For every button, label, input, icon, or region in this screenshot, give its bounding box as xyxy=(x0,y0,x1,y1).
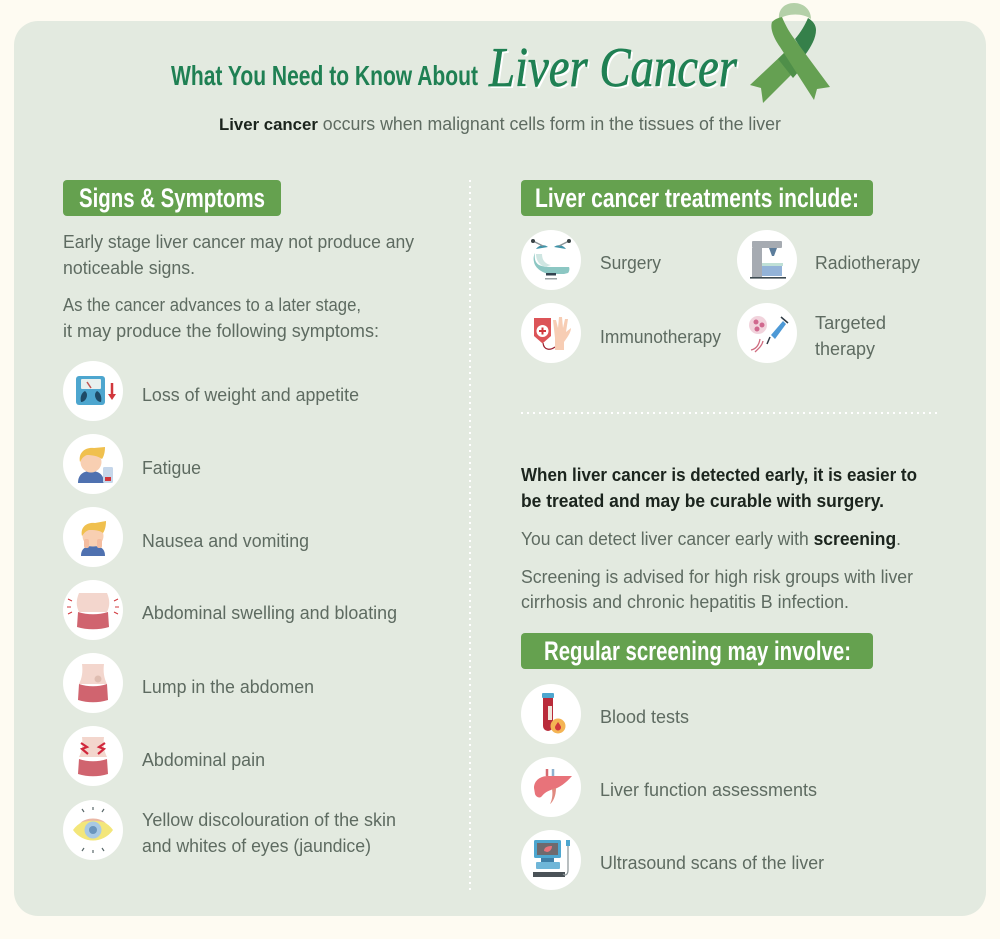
symptom: lump xyxy=(63,653,314,713)
panel: treatments xyxy=(521,180,920,363)
icon: liver xyxy=(521,757,581,817)
icon: nauseous person xyxy=(63,507,123,567)
treatment: immunotherapy: Immunotherapy xyxy=(600,327,721,347)
panel: regular screening xyxy=(521,633,873,890)
symptom: fatigue xyxy=(63,434,201,494)
title: What You Need to Know About xyxy=(171,60,478,91)
heading: regular screening: Regular screening may involve: xyxy=(544,636,851,666)
text block: symptoms intro: noticeable signs. xyxy=(63,258,195,278)
title xyxy=(171,37,739,101)
symptom: swelling: Abdominal swelling and bloating xyxy=(142,603,397,623)
treatment: radiotherapy: Radiotherapy xyxy=(815,253,920,273)
screening: liver function xyxy=(521,757,817,817)
heading: treatments xyxy=(521,180,873,216)
text block: early detection: When liver cancer is detected early, it is easier to xyxy=(521,465,917,485)
subtitle: Liver cancer occurs when malignant cells form in the tissues of the liver xyxy=(219,114,781,134)
title: Liver Cancer xyxy=(488,37,737,99)
text block: early detection: You can detect liver cancer early with screening. xyxy=(521,529,901,549)
treatment: surgery xyxy=(521,230,661,290)
heading: signs and symptoms: Signs & Symptoms xyxy=(79,183,265,213)
symptom: pain xyxy=(63,726,265,786)
icon: cells, syringe and DNA xyxy=(737,303,797,363)
symptom: weight loss: Loss of weight and appetite xyxy=(142,385,359,405)
icon: weighing scale xyxy=(63,361,123,421)
text block: early detection xyxy=(521,465,917,612)
screening: ultrasound: Ultrasound scans of the liver xyxy=(600,853,824,873)
icon: abdomen with lump xyxy=(63,653,123,713)
icon: iv bag and hand xyxy=(521,303,581,363)
heading: signs and symptoms xyxy=(63,180,281,216)
icon: swollen abdomen xyxy=(63,580,123,640)
symptom: jaundice: and whites of eyes (jaundice) xyxy=(142,836,371,856)
icon: surgery table xyxy=(521,230,581,290)
panel: signs and symptoms xyxy=(63,180,414,860)
screening: blood tests: Blood tests xyxy=(600,707,689,727)
screening: blood tests xyxy=(521,684,689,744)
icon: blood test tube xyxy=(521,684,581,744)
treatment: targeted therapy: therapy xyxy=(815,339,875,359)
symptom: swelling xyxy=(63,580,397,640)
icon: radiotherapy machine xyxy=(737,230,797,290)
treatment: targeted therapy: Targeted xyxy=(815,313,886,333)
heading: treatments: Liver cancer treatments include: xyxy=(535,183,859,213)
icon: green ribbon xyxy=(750,3,830,103)
text block: early detection: be treated and may be curable with surgery. xyxy=(521,491,884,511)
symptom: fatigue: Fatigue xyxy=(142,458,201,478)
screening: liver function: Liver function assessments xyxy=(600,780,817,800)
symptom: jaundice: Yellow discolouration of the skin xyxy=(142,810,396,830)
icon: abdomen with pain xyxy=(63,726,123,786)
treatment: radiotherapy xyxy=(737,230,920,290)
text block: symptoms intro: As the cancer advances to a later stage, xyxy=(63,295,361,315)
icon: tired person xyxy=(63,434,123,494)
symptom: weight loss xyxy=(63,361,359,421)
symptom: jaundice xyxy=(63,800,396,860)
treatment: surgery: Surgery xyxy=(600,253,661,273)
text block: symptoms intro: Early stage liver cancer may not produce any xyxy=(63,232,414,252)
text block: symptoms intro xyxy=(63,232,414,341)
title: Liver Cancer xyxy=(490,39,739,101)
symptom: lump: Lump in the abdomen xyxy=(142,677,314,697)
treatment: immunotherapy xyxy=(521,303,721,363)
text block: early detection: cirrhosis and chronic hepatitis B infection. xyxy=(521,592,849,612)
text block: early detection: Screening is advised for high risk groups with liver xyxy=(521,567,913,587)
symptom: nausea xyxy=(63,507,309,567)
heading: regular screening xyxy=(521,633,873,669)
treatment: targeted therapy xyxy=(737,303,886,363)
icon: yellow eye xyxy=(63,800,123,860)
text block: symptoms intro: it may produce the following symptoms: xyxy=(63,321,379,341)
symptom: pain: Abdominal pain xyxy=(142,750,265,770)
screening: ultrasound xyxy=(521,830,824,890)
icon: ultrasound machine xyxy=(521,830,581,890)
symptom: nausea: Nausea and vomiting xyxy=(142,531,309,551)
